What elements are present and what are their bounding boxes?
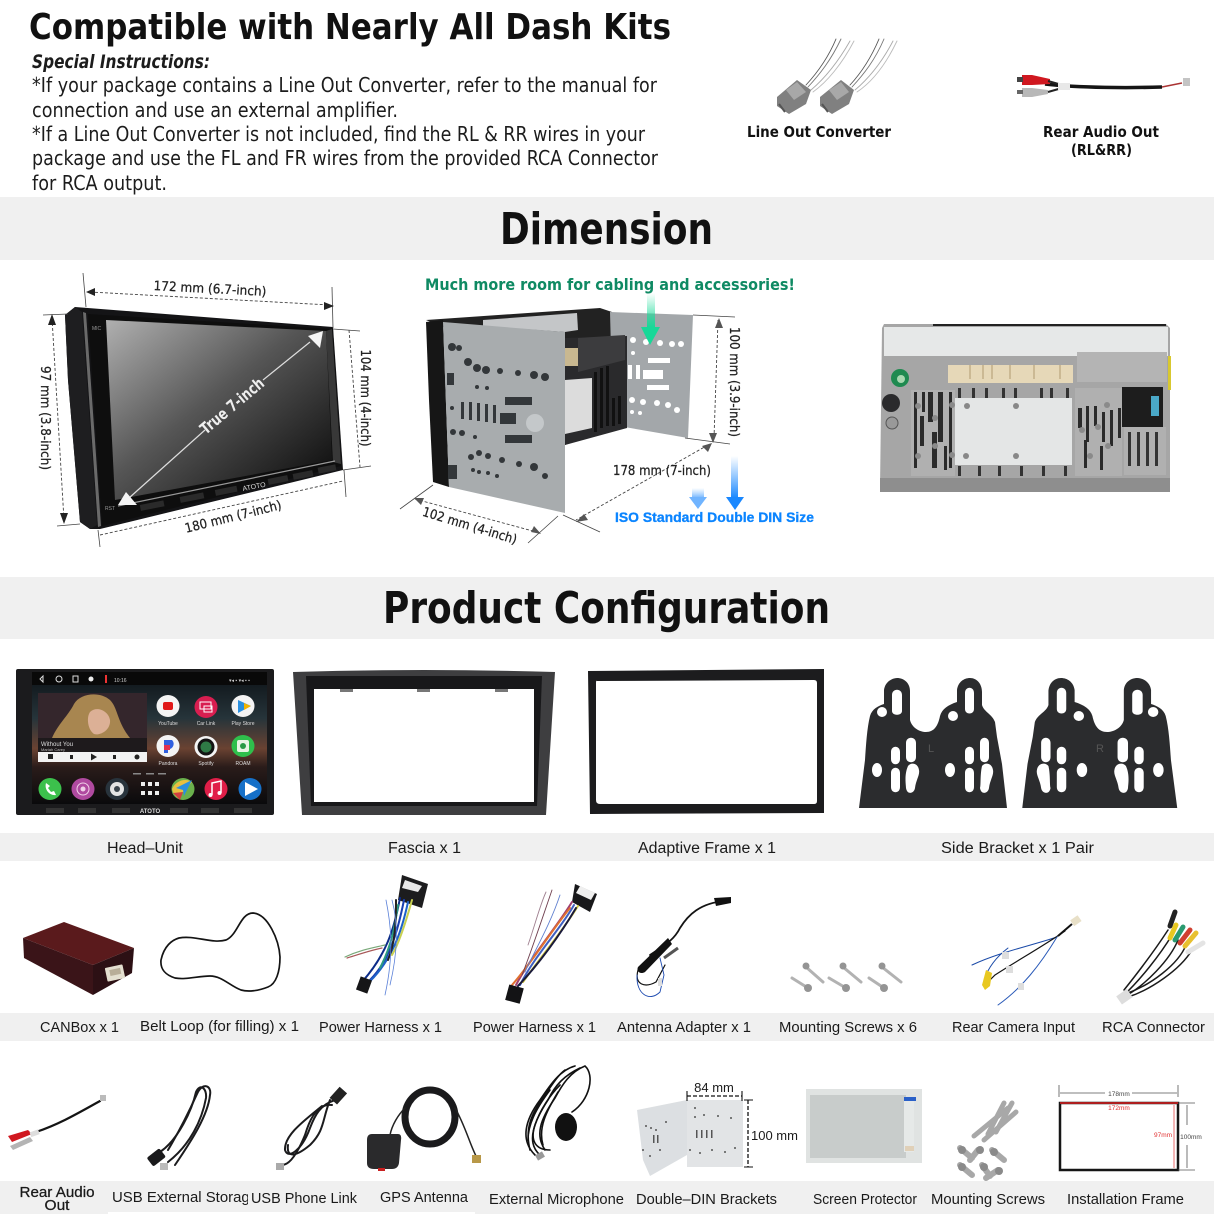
item: USB external storage cable bbox=[147, 1086, 210, 1170]
item: installation frame: 178mm bbox=[1108, 1091, 1130, 1098]
special instructions text block: connection and use an external amplifier. bbox=[32, 98, 398, 122]
item: installation frame: 100mm bbox=[1180, 1134, 1202, 1141]
diagram: front panel dimensions: RST bbox=[105, 506, 115, 512]
heading band: product configuration: Product Configuration bbox=[383, 583, 830, 634]
item: head unit: Car Link bbox=[197, 721, 216, 727]
diagram: rear of head unit bbox=[880, 324, 1171, 492]
row 2 labels: RCA Connector bbox=[1102, 1020, 1205, 1036]
item: rear camera input bbox=[972, 915, 1082, 1005]
item: double-DIN brackets: 84 mm bbox=[694, 1080, 734, 1095]
item: head unit: Pandora bbox=[159, 761, 178, 767]
row 3 labels: Screen Protector bbox=[813, 1192, 917, 1208]
item: installation frame: 172mm bbox=[1108, 1105, 1130, 1112]
item: head unit bbox=[16, 669, 274, 815]
item: head unit: Play Store bbox=[231, 721, 255, 727]
item: rear audio out cable bbox=[8, 1095, 106, 1150]
diagram: front panel dimensions: 97 mm (3.8-inch) bbox=[37, 366, 52, 470]
special instructions text block: package and use the FL and FR wires from the provided RCA Connector bbox=[32, 146, 659, 170]
label band: row 1 bbox=[0, 833, 1214, 861]
item: head unit: Without You bbox=[41, 742, 73, 748]
item: power harness 2 bbox=[505, 884, 597, 1004]
item: belt loop bbox=[161, 913, 280, 991]
item: head unit: YouTube bbox=[158, 721, 178, 727]
row 2 labels: Rear Camera Input bbox=[952, 1020, 1075, 1036]
label band: row 3 bbox=[0, 1181, 1214, 1214]
item: head unit: Spotify bbox=[198, 761, 214, 767]
row 1 labels: Adaptive Frame x 1 bbox=[638, 840, 776, 857]
row 3 labels: Rear Audio bbox=[20, 1185, 94, 1201]
row 3 labels: Double–DIN Brackets bbox=[636, 1192, 777, 1208]
special instructions text block: Special Instructions: bbox=[32, 51, 210, 73]
item: head unit: ATOTO bbox=[140, 809, 160, 815]
diagram: front panel dimensions: 104 mm (4-inch) bbox=[357, 350, 372, 446]
item: CANBox bbox=[23, 922, 134, 995]
special instructions text block: *If your package contains a Line Out Converter, refer to the manual for bbox=[32, 73, 658, 97]
label: rear audio out bbox=[1043, 123, 1159, 159]
label band: row 2 bbox=[0, 1013, 1214, 1041]
item: USB phone link cable bbox=[276, 1087, 347, 1170]
row 2 labels: Power Harness x 1 bbox=[319, 1020, 442, 1036]
item: installation frame: 97mm bbox=[1154, 1132, 1172, 1139]
label: line out converter: Line Out Converter bbox=[747, 123, 892, 141]
item: side bracket left: L bbox=[928, 743, 934, 755]
item: adaptive frame bbox=[588, 669, 824, 814]
item: installation frame bbox=[1059, 1085, 1202, 1170]
heading band: product configuration bbox=[0, 577, 1214, 639]
row 3 labels: GPS Antenna bbox=[380, 1190, 469, 1206]
row 3 labels: Mounting Screws bbox=[931, 1192, 1045, 1208]
row 3 labels: Out bbox=[44, 1198, 70, 1214]
item: side bracket left bbox=[859, 678, 1007, 808]
item: mounting screws x 6 bbox=[792, 962, 901, 992]
heading band: dimension: Dimension bbox=[500, 204, 713, 255]
row 3 labels: Installation Frame bbox=[1067, 1192, 1184, 1208]
row 1 labels: Side Bracket x 1 Pair bbox=[941, 840, 1094, 857]
row 2 labels: Belt Loop (for filling) x 1 bbox=[140, 1019, 299, 1035]
diagram: front panel dimensions: 172 mm (6.7-inch) bbox=[153, 279, 267, 300]
item: side bracket right: R bbox=[1096, 743, 1104, 755]
icon: rear audio out cable bbox=[1017, 75, 1190, 97]
special instructions text block: for RCA output. bbox=[32, 171, 167, 195]
diagram: front panel dimensions: True 7-inch bbox=[196, 374, 268, 438]
item: head unit: 10:16 bbox=[114, 678, 127, 684]
row 2 labels: CANBox x 1 bbox=[40, 1020, 119, 1036]
diagram: chassis cage dimensions: 100 mm (3.9-inch) bbox=[726, 327, 741, 437]
title: Compatible with Nearly All Dash Kits bbox=[29, 7, 671, 48]
label: rear audio out: (RL&RR) bbox=[1071, 141, 1132, 159]
item: double-DIN brackets bbox=[637, 1080, 798, 1176]
item: antenna adapter bbox=[637, 897, 731, 997]
callout: more room heading: Much more room for cabling and accessories! bbox=[425, 275, 795, 294]
item: side bracket right bbox=[1022, 678, 1177, 808]
diagram: chassis cage dimensions bbox=[400, 275, 814, 548]
item: GPS antenna bbox=[367, 1090, 481, 1171]
diagram: chassis cage dimensions: 102 mm (4-inch) bbox=[421, 505, 519, 548]
diagram: front panel dimensions: MIC bbox=[92, 326, 102, 332]
row 3 labels: USB External Storage bbox=[112, 1190, 258, 1206]
row 2 labels: Antenna Adapter x 1 bbox=[617, 1020, 751, 1036]
row 1 labels bbox=[107, 840, 1094, 857]
row 1 labels: Fascia x 1 bbox=[388, 840, 461, 857]
diagram: front panel dimensions: ATOTO bbox=[242, 482, 267, 493]
diagram: front panel dimensions: 180 mm (7-inch) bbox=[184, 498, 283, 537]
item: head unit: ROAM bbox=[236, 761, 250, 767]
row 2 labels: Mounting Screws x 6 bbox=[779, 1020, 917, 1036]
icon: line out converter bbox=[777, 39, 897, 114]
row 1 labels: Head–Unit bbox=[107, 840, 184, 857]
heading band: dimension bbox=[0, 197, 1214, 260]
row 3 labels bbox=[20, 1185, 1184, 1214]
item: RCA connector bbox=[1116, 912, 1203, 1005]
special instructions text block bbox=[32, 51, 659, 195]
item: fascia bbox=[293, 670, 555, 815]
row 2 labels bbox=[40, 1019, 1205, 1036]
item: head unit: ▾◂ ▪ ▾◂ ▪ ▪ bbox=[229, 678, 250, 684]
item: power harness 1 bbox=[345, 875, 428, 995]
label: rear audio out: Rear Audio Out bbox=[1043, 123, 1159, 141]
row 2 labels: Power Harness x 1 bbox=[473, 1020, 596, 1036]
item: screen protector bbox=[806, 1089, 922, 1163]
row 3 labels: USB Phone Link bbox=[251, 1191, 358, 1207]
diagram: front panel dimensions bbox=[37, 273, 372, 547]
row 3 labels: External Microphone bbox=[489, 1192, 624, 1208]
item: mounting screws bbox=[958, 1103, 1016, 1178]
item: external microphone bbox=[526, 1066, 590, 1161]
item: double-DIN brackets: 100 mm bbox=[751, 1128, 798, 1143]
diagram: chassis cage dimensions: 178 mm (7-inch) bbox=[613, 464, 711, 479]
item: head unit: Mariah Carey bbox=[41, 747, 65, 752]
special instructions text block: *If a Line Out Converter is not included, find the RL & RR wires in your bbox=[32, 122, 646, 146]
callout: ISO standard size: ISO Standard Double DIN Size bbox=[615, 509, 814, 525]
